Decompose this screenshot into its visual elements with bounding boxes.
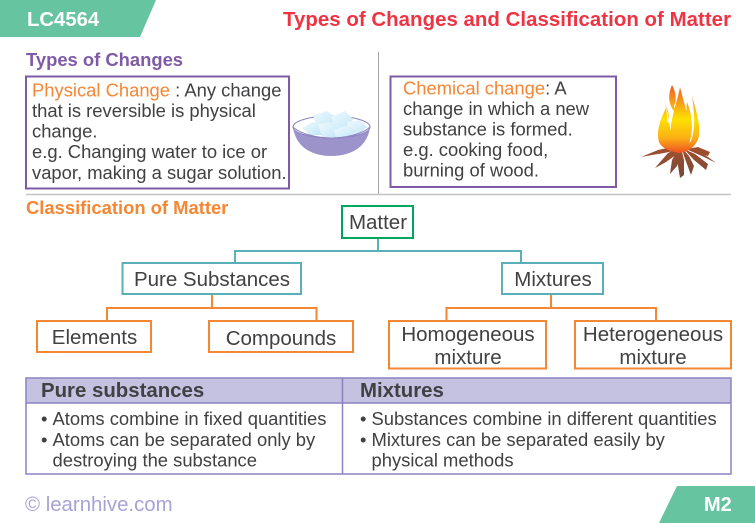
title: Types of Changes and Classification of Matter	[283, 9, 731, 31]
node: homogeneous mixture: mixture	[434, 346, 502, 369]
node: pure substances: Pure Substances	[134, 268, 290, 291]
node: elements	[37, 321, 151, 352]
panel: chemical change: burning of wood.	[403, 160, 539, 180]
column: pure substances: •	[41, 408, 47, 429]
divider lines	[378, 52, 380, 194]
panel: chemical change	[390, 76, 616, 187]
footer page tab	[659, 486, 755, 523]
panel: chemical change: substance is formed.	[403, 118, 573, 140]
panel: chemical change: change in which a new	[403, 98, 590, 119]
node: matter	[342, 206, 413, 238]
panel: physical change: Physical Change : Any change	[32, 80, 281, 100]
column: mixtures: physical methods	[372, 450, 514, 470]
column: mixtures: •	[360, 429, 366, 450]
footer copyright: © learnhive.com	[25, 494, 173, 516]
panel: physical change: that is reversible is physical	[32, 100, 256, 121]
connectors: pure substances branch	[107, 294, 316, 321]
node: homogeneous mixture: Homogeneous	[401, 323, 535, 346]
header code tab	[0, 0, 156, 37]
node: mixtures	[502, 263, 603, 294]
panel: physical change: e.g. Changing water to ice or	[32, 141, 267, 162]
node: heterogeneous mixture: Heterogeneous	[583, 323, 723, 346]
connectors: matter branch	[235, 238, 521, 263]
footer page tab: M2	[704, 494, 732, 516]
panel: physical change	[26, 76, 289, 188]
node: heterogeneous mixture: mixture	[619, 346, 687, 369]
icon: bowl of ice	[293, 111, 370, 156]
node: homogeneous mixture	[389, 321, 546, 369]
column: mixtures: •	[360, 408, 366, 429]
panel: chemical change: Chemical change: A	[403, 78, 567, 98]
header code tab: LC4564	[27, 9, 100, 31]
node: elements: Elements	[52, 326, 137, 349]
panel: chemical change: e.g. cooking food,	[403, 139, 548, 160]
node: compounds	[209, 321, 353, 352]
node: pure substances	[122, 263, 301, 294]
node: mixtures: Mixtures	[514, 268, 592, 291]
column: mixtures: Mixtures	[360, 380, 444, 402]
column: pure substances	[41, 380, 326, 470]
connectors: mixtures branch	[446, 294, 656, 321]
column: mixtures: Substances combine in different quantities	[372, 408, 717, 429]
column: pure substances: Atoms can be separated only by	[52, 429, 316, 450]
heading: classification of matter: Classification of Matter	[26, 197, 228, 218]
node: heterogeneous mixture	[575, 321, 731, 369]
panel: physical change: vapor, making a sugar solution.	[32, 162, 287, 183]
column: pure substances: Atoms combine in fixed quantities	[52, 408, 326, 429]
column: pure substances: destroying the substance	[52, 450, 257, 470]
icon: campfire	[641, 85, 716, 178]
column: mixtures: Mixtures can be separated easily by	[372, 429, 666, 450]
tree chart: classification of matter	[37, 206, 731, 369]
node: compounds: Compounds	[226, 327, 336, 350]
column: mixtures	[360, 380, 717, 470]
column: pure substances: •	[41, 429, 47, 450]
comparison table	[26, 378, 731, 474]
heading: types of changes: Types of Changes	[26, 49, 183, 70]
panel: physical change: change.	[32, 120, 97, 142]
node: matter: Matter	[349, 211, 407, 234]
column: pure substances: Pure substances	[41, 380, 204, 402]
